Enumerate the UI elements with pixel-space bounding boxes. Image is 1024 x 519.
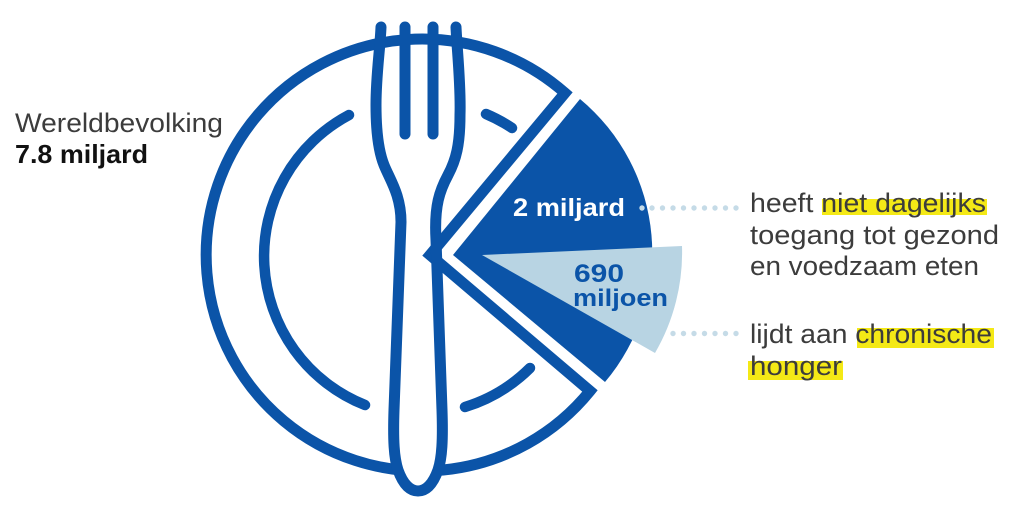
icon: fork: [376, 27, 460, 491]
label: 690 miljoen: miljoen: [573, 285, 668, 312]
text: chronic hunger description: [748, 319, 994, 381]
icon: plate inner rim, left arc: [264, 115, 365, 405]
text: daily access description: heeft niet dagelijks: [750, 188, 986, 218]
pie slice: 2 miljard: [453, 99, 652, 382]
icon: plate inner rim, lower right: [465, 368, 530, 407]
text: chronic hunger description: honger: [750, 351, 842, 381]
icon: plate outline with notch: [206, 39, 590, 471]
text: chronic hunger description: lijdt aan chronische: [750, 319, 992, 349]
text: world population: 7.8 miljard: [15, 139, 148, 169]
dotted leader: 690 miljoen: [670, 331, 739, 336]
label: 2 miljard: 2 miljard: [513, 194, 625, 222]
text: daily access description: [750, 188, 999, 281]
pie slice: 690 miljoen: [482, 246, 682, 353]
text: daily access description: toegang tot gezond: [750, 220, 999, 250]
label: 690 miljoen: 690: [574, 260, 624, 288]
text: world population: [15, 108, 223, 169]
text: daily access description: en voedzaam eten: [750, 251, 979, 281]
dotted leader: 2 miljard: [639, 205, 739, 211]
label: 690 miljoen: [573, 260, 668, 312]
icon: plate inner rim, upper right: [486, 114, 512, 128]
text: world population: Wereldbevolking: [15, 108, 223, 138]
